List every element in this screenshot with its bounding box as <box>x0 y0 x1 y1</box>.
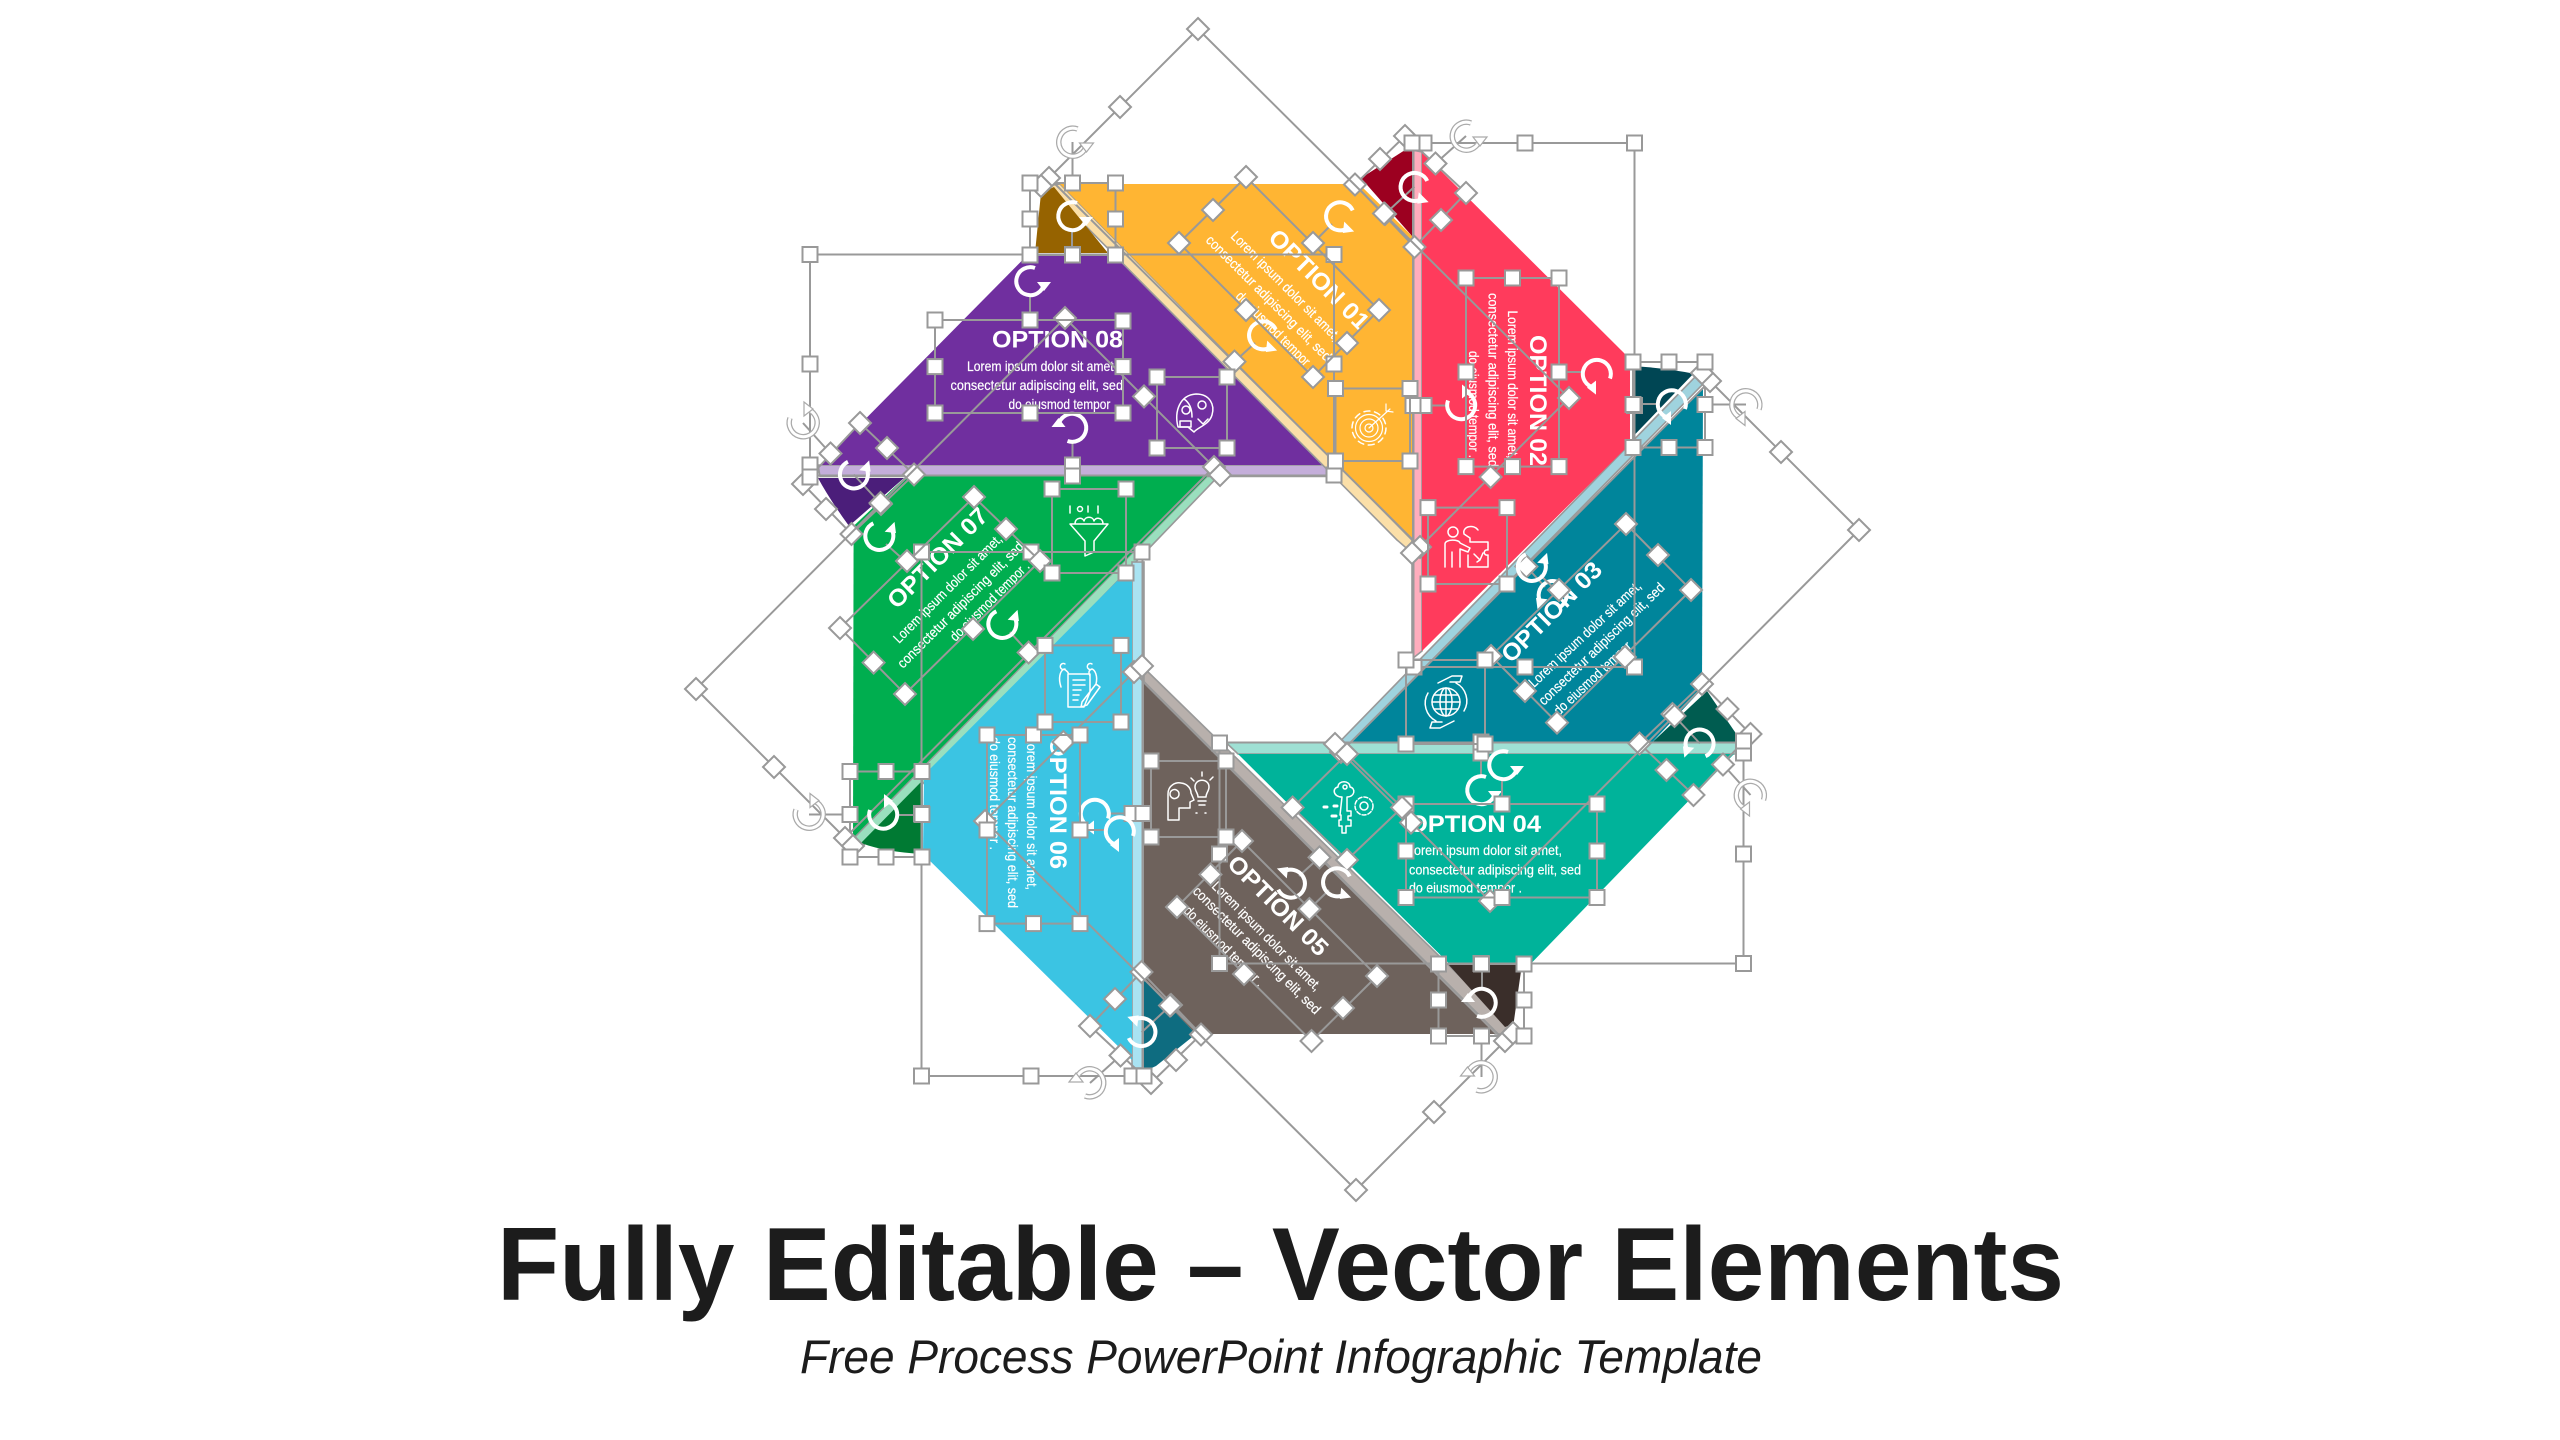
option 04 heading: OPTION 04 <box>1408 811 1542 838</box>
handles: option 05 icon <box>1144 754 1234 844</box>
option 07 body <box>853 476 1207 838</box>
option 06 text <box>987 737 1040 908</box>
frame: option 08 <box>789 247 1342 545</box>
selection frames: even options <box>789 122 1764 1097</box>
panel: option 03 <box>1339 366 1703 742</box>
icon: head and light bulb <box>1168 772 1213 820</box>
option 08 strip <box>818 465 1335 476</box>
icon: creative head <box>1177 394 1213 432</box>
option 06 strip <box>1132 562 1144 1068</box>
option 06 text: do eiusmod tempor . <box>987 737 1003 850</box>
option 01 heading: OPTION 01 <box>1263 224 1374 336</box>
panel: option 01 <box>1035 184 1412 553</box>
option 07 strip <box>853 476 1218 848</box>
option 01 body <box>1060 184 1412 540</box>
option 02 heading: OPTION 02 <box>1524 335 1551 466</box>
title: Fully Editable – Vector Elements <box>497 1207 2064 1323</box>
option 08 body <box>820 254 1323 465</box>
option 05 text: do eiusmod tempor . <box>1181 902 1268 989</box>
option 06 text: Lorem ipsum dolor sit amet, <box>1024 737 1040 890</box>
option 03 heading: OPTION 03 <box>1496 557 1608 668</box>
option 04 text: Lorem ipsum dolor sit amet, <box>1407 842 1562 858</box>
handles: option 08 icon <box>1150 370 1234 456</box>
option 06 text: consectetur adipiscing elit, sed <box>1005 737 1021 908</box>
icon: person with puzzle <box>1445 527 1488 567</box>
handles: option 03 text <box>1480 513 1702 734</box>
frame: option 06 <box>914 544 1212 1097</box>
option 06 body <box>923 566 1132 1060</box>
option 03 text: Lorem ipsum dolor sit amet, <box>1525 578 1644 690</box>
handles: option 08 text <box>928 267 1130 420</box>
option 02 body <box>1422 152 1630 651</box>
option 05 fold <box>1448 964 1522 1027</box>
selection frames: odd options <box>685 18 1870 1201</box>
option 01 text: consectetur adipiscing elit, sed <box>1203 232 1335 364</box>
option 05 heading: OPTION 05 <box>1222 850 1333 962</box>
option 08 fold <box>818 478 904 526</box>
option 04 strip <box>1226 742 1737 754</box>
option 02 strip <box>1412 150 1422 659</box>
handles: option 04 text <box>1398 751 1604 905</box>
handles: option 03 icon <box>1398 652 1492 752</box>
option 03 fold <box>1632 366 1694 437</box>
handles: option 07 icon <box>1044 482 1134 580</box>
frame: option 03 <box>1324 354 1870 912</box>
option 06 heading: OPTION 06 <box>1044 737 1071 869</box>
panel: option 04 <box>1226 691 1737 962</box>
frame: option 05 <box>974 655 1532 1201</box>
frame: option 02 <box>1344 122 1642 674</box>
text and icon handles <box>829 166 1702 1052</box>
handles: option 05 text <box>1166 830 1388 1052</box>
option 05 text: consectetur adipiscing elit, sed <box>1190 883 1324 1017</box>
option 07 text: consectetur adipiscing elit, sed <box>894 538 1027 671</box>
option 08 text: consectetur adipiscing elit, sed <box>950 377 1123 393</box>
option 06 fold <box>1144 980 1196 1070</box>
option 03 body <box>1351 387 1703 742</box>
option 02 text: Lorem ipsum dolor sit amet, <box>1505 310 1521 458</box>
icon: funnel <box>1070 506 1108 556</box>
option 07 fold <box>861 781 922 854</box>
frame: option 07 <box>685 307 1231 864</box>
handles: option 02 text <box>1458 270 1611 474</box>
option 08 text: Lorem ipsum dolor sit amet, <box>967 358 1117 374</box>
handles: option 06 icon <box>1038 638 1128 730</box>
option 04 text: consectetur adipiscing elit, sed <box>1409 862 1581 878</box>
option 01 fold <box>1035 187 1108 253</box>
icon: document and people <box>1060 664 1100 707</box>
subtitle: Free Process PowerPoint Infographic Template <box>800 1330 1762 1383</box>
option 08 text: do eiusmod tempor . <box>1008 396 1117 412</box>
option 01 text: do eiusmod tempor . <box>1233 288 1318 373</box>
option 03 text: do eiusmod tempor . <box>1550 634 1639 718</box>
handles: option 07 text <box>829 486 1051 705</box>
option 04 fold <box>1652 691 1737 742</box>
panel: option 02 <box>1361 150 1630 659</box>
option 04 text <box>1407 842 1581 896</box>
option 02 text: consectetur adipiscing elit, sed <box>1486 293 1502 467</box>
option 02 fold <box>1361 150 1412 236</box>
option 02 text <box>1466 293 1521 467</box>
panel: option 07 <box>853 476 1218 854</box>
icon: gear with target <box>1352 404 1393 445</box>
option 03 strip <box>1339 376 1703 742</box>
handles: option 06 text <box>980 728 1134 931</box>
option 03 text: consectetur adipiscing elit, sed <box>1535 579 1668 708</box>
icon: globe in hands <box>1425 676 1467 728</box>
frame: option 01 <box>1022 18 1580 564</box>
option 07 heading: OPTION 07 <box>882 503 994 614</box>
option 04 text: do eiusmod tempor . <box>1409 880 1522 896</box>
handles: option 01 icon <box>1328 381 1418 468</box>
panel: option 06 <box>923 562 1196 1070</box>
icon: key and gear <box>1324 782 1373 833</box>
option 05 text: Lorem ipsum dolor sit amet, <box>1209 878 1325 994</box>
option 05 body <box>1144 684 1495 1034</box>
option 07 text: do eiusmod tempor . <box>946 558 1033 644</box>
option 05 strip <box>1144 668 1513 1034</box>
option 02 text: do eiusmod tempor . <box>1466 351 1482 458</box>
option 04 body <box>1238 754 1734 962</box>
handles: option 02 icon <box>1420 500 1514 592</box>
option 08 heading: OPTION 08 <box>992 326 1123 354</box>
option 01 strip <box>1046 184 1412 553</box>
handles: option 04 icon <box>1282 743 1413 871</box>
option 01 text: Lorem ipsum dolor sit amet, <box>1228 228 1344 344</box>
option 08 text <box>950 358 1123 412</box>
panel: option 08 <box>818 254 1335 526</box>
panel: option 05 <box>1144 668 1522 1034</box>
option 07 text: Lorem ipsum dolor sit amet, <box>890 531 1005 646</box>
frame: option 04 <box>1212 673 1764 971</box>
handles: option 01 text <box>1168 166 1390 388</box>
